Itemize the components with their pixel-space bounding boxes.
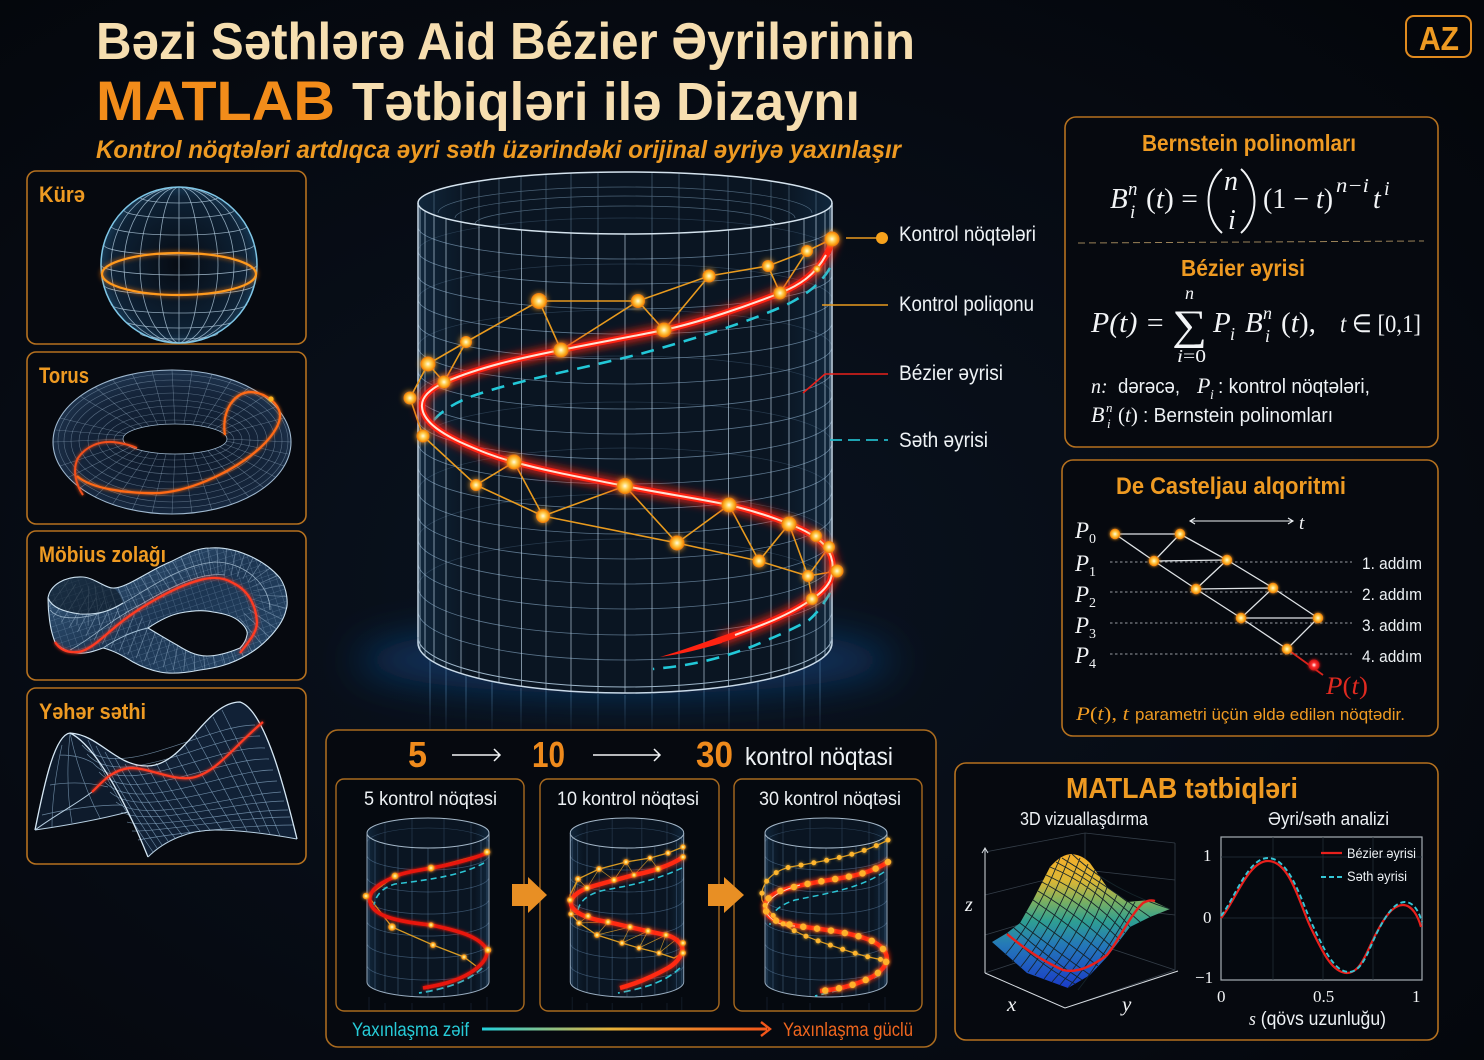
formula: Bernstein polynomial: t xyxy=(1373,184,1382,215)
panel: sphere xyxy=(27,171,306,344)
formula: Bezier curve: i xyxy=(1265,326,1270,346)
formula: Bernstein polynomial: n xyxy=(1128,179,1138,200)
formula: Bezier curve: n xyxy=(1185,283,1194,303)
legend: Bezier curve xyxy=(803,362,1003,393)
surface mesh xyxy=(1005,854,1170,990)
formula legend: P xyxy=(1196,373,1210,398)
tick labels: 0.5 xyxy=(1313,987,1334,1006)
subheading: 3D: 3D vizuallaşdırma xyxy=(1020,809,1149,829)
construction points xyxy=(1110,529,1323,654)
cylinder verticals xyxy=(420,207,830,693)
chart legend: Bézier əyrisi xyxy=(1347,845,1416,861)
AZ badge: AZ xyxy=(1419,20,1459,57)
formula: Bezier curve: i=0 xyxy=(1177,346,1206,366)
result point xyxy=(1308,660,1320,670)
t parameter arrow xyxy=(1190,513,1305,534)
convergence scale xyxy=(352,1020,913,1041)
formula: Bezier curve: (t), xyxy=(1281,308,1316,339)
weak label: Yaxınlaşma zəif xyxy=(352,1020,470,1041)
cylinder reflection xyxy=(430,660,820,735)
3D surface plot xyxy=(964,833,1178,1016)
formula: Bernstein polynomial: (1 − t) xyxy=(1263,184,1333,215)
formula legend: n: xyxy=(1091,376,1108,398)
header row xyxy=(408,734,893,775)
formula legend: n xyxy=(1106,400,1112,415)
caption: P(t), t xyxy=(1075,704,1130,725)
panel: Bernstein and Bezier formulas xyxy=(1065,117,1438,447)
surface curve (cyan dashed) xyxy=(433,268,830,669)
label P(t): P(t) xyxy=(1325,673,1368,700)
3D surface plot: y xyxy=(1120,992,1132,1016)
heading: Mobius: Möbius zolağı xyxy=(39,542,166,567)
axis labels: z xyxy=(964,894,973,916)
subtitle: Kontrol nöqtələri artdıqca əyri səth üzərindəki orijinal əyriyə yaxınlaşır xyxy=(96,136,902,164)
heading: MATLAB: MATLAB tətbiqləri xyxy=(1066,773,1298,805)
main cylinder xyxy=(355,172,895,735)
Mobius wireframe xyxy=(47,547,288,674)
formula legend: dərəcə, xyxy=(1118,376,1180,398)
formula legend: : kontrol nöqtələri, xyxy=(1218,376,1370,398)
AZ badge xyxy=(1406,16,1471,57)
axes box xyxy=(985,833,1175,1008)
step labels: 3. addım xyxy=(1362,616,1422,635)
title line 2: MATLAB xyxy=(96,69,335,132)
panel: control point convergence xyxy=(326,730,936,1047)
t parameter arrow: t xyxy=(1299,513,1305,534)
step guide lines xyxy=(1110,562,1352,654)
torus wireframe xyxy=(53,370,291,514)
formula legend: (t) xyxy=(1118,403,1138,427)
cylinder base double rim xyxy=(418,637,832,687)
point labels: 4 xyxy=(1089,657,1096,672)
divider xyxy=(1078,241,1424,243)
step labels xyxy=(1362,554,1422,666)
mini cylinder 10 xyxy=(570,818,684,1010)
title xyxy=(96,13,915,164)
formula: Bernstein polynomial xyxy=(1110,166,1390,236)
subheading: analysis: Əyri/səth analizi xyxy=(1268,809,1389,829)
2D line chart xyxy=(1195,837,1422,1030)
legend: control polygon: Kontrol poliqonu xyxy=(899,293,1034,316)
mini points 5 xyxy=(363,849,491,960)
formula: Bernstein polynomial: i xyxy=(1228,205,1236,236)
point labels: P xyxy=(1074,643,1089,668)
header row: 5 xyxy=(408,734,427,775)
cylinder rim xyxy=(418,172,832,234)
subpanel: 10 points xyxy=(540,779,719,1011)
subpanel: 5 points xyxy=(336,779,524,1011)
heading: De Casteljau: De Casteljau alqoritmi xyxy=(1116,473,1346,500)
mini points 10 xyxy=(567,844,686,956)
point labels: 0 xyxy=(1089,532,1096,547)
formula: Bezier curve: P xyxy=(1212,307,1231,339)
mini points 30 xyxy=(762,840,888,991)
blue floor glow xyxy=(355,626,895,694)
formula legend xyxy=(1091,373,1370,431)
formula: Bernstein polynomial: i xyxy=(1130,202,1135,223)
panel: saddle surface xyxy=(27,688,306,864)
panel: MATLAB applications xyxy=(955,763,1438,1040)
panel: torus xyxy=(27,352,306,524)
legend: curve labels xyxy=(803,223,1036,452)
chart grid xyxy=(1221,837,1422,980)
control polygon xyxy=(410,239,837,599)
3D surface plot: x xyxy=(1006,992,1017,1016)
tick labels xyxy=(1195,846,1420,1006)
tick labels: 0 xyxy=(1217,987,1226,1006)
heading: torus: Torus xyxy=(39,363,89,388)
formula: Bezier curve: B xyxy=(1245,307,1263,339)
formula: Bezier curve: n xyxy=(1263,303,1272,323)
point labels: 1 xyxy=(1089,565,1096,580)
mini cylinder 5 xyxy=(367,818,489,1010)
subheading: 5: 5 kontrol nöqtəsi xyxy=(364,789,497,810)
step labels: 2. addım xyxy=(1362,585,1422,604)
tick labels: 0 xyxy=(1203,908,1212,927)
formula: Bernstein polynomial: n xyxy=(1224,166,1238,197)
control points xyxy=(404,232,844,605)
saddle wireframe xyxy=(35,702,297,857)
orange curve on torus xyxy=(75,392,280,495)
panel: De Casteljau algorithm xyxy=(1062,460,1438,736)
point labels: P xyxy=(1074,518,1089,543)
title line 1: Bəzi Səthlərə Aid Bézier Əyrilərinin xyxy=(96,13,915,71)
formula legend: i xyxy=(1210,388,1214,403)
x axis title: s (qövs uzunluğu) xyxy=(1249,1009,1386,1030)
sphere wireframe xyxy=(101,187,257,343)
subpanel: 30 points xyxy=(734,779,922,1011)
panel: Mobius strip xyxy=(27,531,306,680)
point labels: P xyxy=(1074,613,1089,638)
header row: 30 xyxy=(696,734,733,775)
formula: Bernstein polynomial: B xyxy=(1110,183,1128,215)
heading: sphere: Kürə xyxy=(39,182,85,207)
step labels: 4. addım xyxy=(1362,647,1422,666)
caption: parametri üçün əldə edilən nöqtədir. xyxy=(1135,705,1405,724)
point labels xyxy=(1074,518,1096,672)
legend: control points xyxy=(846,223,1036,246)
mini curves 5 xyxy=(368,853,487,993)
heading: saddle: Yəhər səthi xyxy=(39,699,146,724)
legend: control points: Kontrol nöqtələri xyxy=(899,223,1036,246)
surface Bezier curve xyxy=(1007,900,1155,971)
formula: Bezier curve: ∑ xyxy=(1172,303,1207,349)
tick labels: −1 xyxy=(1195,968,1213,987)
formula legend: : Bernstein polinomları xyxy=(1143,405,1333,427)
subheading: 30: 30 kontrol nöqtəsi xyxy=(759,789,901,810)
legend: surface curve: Səth əyrisi xyxy=(899,429,988,452)
formula legend: B xyxy=(1091,402,1104,427)
surface xyxy=(992,854,1170,988)
mini curves 30 xyxy=(762,840,888,996)
cylinder outline xyxy=(418,203,832,693)
formula legend: i xyxy=(1107,416,1111,431)
gradient arrow xyxy=(482,1028,767,1030)
cylinder body xyxy=(418,172,832,693)
formula: Bezier curve: P(t) = xyxy=(1090,307,1165,339)
formula: Bernstein polynomial: (t) = xyxy=(1146,184,1198,215)
step labels: 1. addım xyxy=(1362,554,1422,573)
chart legend: Səth əyrisi xyxy=(1347,868,1407,884)
title line 2 rest: Tətbiqləri ilə Dizaynı xyxy=(352,72,860,132)
heading: Bezier curve: Bézier əyrisi xyxy=(1181,255,1305,281)
formula: Bezier curve xyxy=(1090,283,1421,366)
strong label: Yaxınlaşma güclü xyxy=(783,1020,913,1041)
arrow xyxy=(708,877,744,913)
mini curves 10 xyxy=(570,847,683,993)
heading: Bernstein: Bernstein polinomları xyxy=(1142,130,1356,156)
construction lines xyxy=(1115,534,1318,649)
legend: Bezier curve: Bézier əyrisi xyxy=(899,362,1003,385)
red curve on Mobius xyxy=(55,578,257,653)
surface line xyxy=(1221,858,1422,972)
formula: Bezier curve: t ∈ [0,1] xyxy=(1340,311,1421,338)
header row: 10 xyxy=(532,734,565,775)
tick labels: 1 xyxy=(1412,987,1420,1006)
chart legend xyxy=(1321,845,1416,884)
point labels: 2 xyxy=(1089,596,1096,611)
point labels: 3 xyxy=(1089,627,1096,642)
point labels: P xyxy=(1074,582,1089,607)
formula: Bernstein polynomial: n−i xyxy=(1336,175,1369,197)
point labels: P xyxy=(1074,551,1089,576)
header row: kontrol nöqtasi xyxy=(745,743,893,771)
cylinder back rings xyxy=(418,218,832,587)
mini cylinder 30 xyxy=(765,818,887,1010)
formula: Bernstein polynomial: i xyxy=(1384,178,1390,200)
subheading: 10: 10 kontrol nöqtəsi xyxy=(557,789,699,810)
Bezier line xyxy=(1221,861,1421,973)
arrow xyxy=(512,877,547,913)
orange curve on sphere xyxy=(102,253,256,295)
cylinder front rings xyxy=(418,227,832,660)
result segment xyxy=(1287,649,1323,675)
Bezier curve (red glowing) xyxy=(422,240,833,657)
cylinder open top inner grid xyxy=(434,172,816,234)
formula: Bezier curve: i xyxy=(1230,324,1235,344)
tick labels: 1 xyxy=(1203,846,1212,865)
red curve on saddle xyxy=(92,722,263,792)
